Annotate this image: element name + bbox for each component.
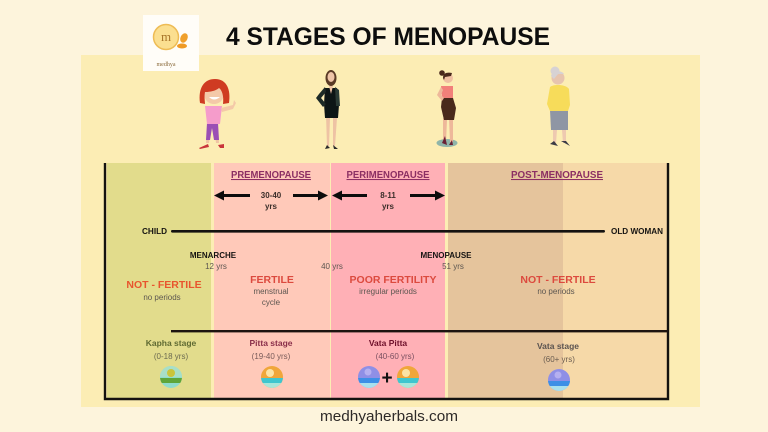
label: poor fertility: POOR FERTILITY bbox=[350, 274, 436, 286]
label: fertile: FERTILE bbox=[250, 274, 294, 286]
duration: 30-40 yrs: yrs bbox=[265, 202, 278, 211]
icon: pitta bbox=[261, 366, 283, 388]
dosha: vata: Vata stage bbox=[537, 341, 579, 351]
marker: menopause: 51 yrs bbox=[442, 262, 464, 271]
marker: menarche: MENARCHE bbox=[190, 251, 237, 260]
heading: premenopause: PREMENOPAUSE bbox=[231, 169, 311, 181]
logo: medhya: m bbox=[161, 29, 171, 44]
marker: menarche: 12 yrs bbox=[205, 262, 227, 271]
chart frame bbox=[105, 163, 668, 399]
divider line above dosha row bbox=[171, 330, 668, 332]
heading: post-menopause: POST-MENOPAUSE bbox=[511, 169, 603, 181]
logo: medhya bbox=[143, 15, 199, 71]
icon: kapha bbox=[160, 366, 182, 388]
marker: 40 yrs: 40 yrs bbox=[321, 262, 343, 271]
marker: menopause: MENOPAUSE bbox=[421, 251, 472, 260]
icon: vata bbox=[548, 369, 570, 391]
timeline: child to old woman bbox=[142, 227, 663, 236]
duration: 30-40 yrs: 30-40 bbox=[261, 191, 282, 200]
dosha: pitta: Pitta stage bbox=[250, 338, 293, 348]
panel: post-menopause column light bbox=[563, 163, 667, 398]
panel: perimenopause column bbox=[331, 163, 445, 398]
dosha: vata bbox=[537, 341, 579, 391]
label: child not fertile: no periods bbox=[143, 293, 181, 302]
label: fertile: menstrual bbox=[253, 287, 289, 296]
arrow: premenopause left bbox=[214, 190, 250, 200]
panel: post-menopause column dark bbox=[448, 163, 563, 398]
panel: premenopause column bbox=[214, 163, 330, 398]
label: post-menopause not fertile: no periods bbox=[537, 287, 575, 296]
label: post-menopause not fertile: NOT - FERTILE bbox=[520, 274, 596, 286]
duration: 8-11 yrs: yrs bbox=[382, 202, 395, 211]
figure: woman with pink top and brown skirt bbox=[436, 70, 458, 147]
icon: pitta bbox=[397, 366, 419, 388]
dosha: pitta bbox=[250, 338, 293, 388]
figure: child bbox=[199, 79, 236, 149]
plus sign: + bbox=[381, 368, 393, 389]
arrow: perimenopause right bbox=[410, 190, 445, 200]
label: child not fertile: NOT - FERTILE bbox=[126, 279, 202, 291]
figure: woman in black dress bbox=[316, 70, 340, 149]
dosha: vata pitta: Vata Pitta bbox=[369, 338, 407, 348]
label: fertile: cycle bbox=[262, 298, 281, 307]
yellow content panel bbox=[81, 55, 700, 407]
arrow: perimenopause left bbox=[332, 190, 367, 200]
icon: vata bbox=[358, 366, 380, 388]
title: 4 STAGES OF MENOPAUSE bbox=[226, 23, 550, 51]
footer website: medhyaherbals.com bbox=[320, 409, 458, 425]
dosha: kapha bbox=[146, 338, 197, 388]
logo: medhya: medhya bbox=[156, 62, 176, 68]
timeline: child to old woman: CHILD bbox=[142, 227, 167, 236]
dosha: pitta: (19-40 yrs) bbox=[252, 352, 291, 361]
figure: old woman bbox=[547, 66, 570, 146]
dosha: vata pitta: (40-60 yrs) bbox=[376, 352, 415, 361]
dosha: kapha: (0-18 yrs) bbox=[154, 352, 188, 361]
dosha: vata pitta bbox=[358, 338, 419, 389]
duration: 8-11 yrs: 8-11 bbox=[380, 191, 396, 200]
dosha: vata: (60+ yrs) bbox=[543, 355, 575, 364]
panel: child column bbox=[107, 163, 211, 398]
heading: perimenopause: PERIMENOPAUSE bbox=[346, 169, 430, 181]
label: poor fertility: irregular periods bbox=[359, 287, 417, 296]
arrow: premenopause right bbox=[293, 190, 328, 200]
dosha: kapha: Kapha stage bbox=[146, 338, 197, 348]
timeline: child to old woman: OLD WOMAN bbox=[611, 227, 663, 236]
